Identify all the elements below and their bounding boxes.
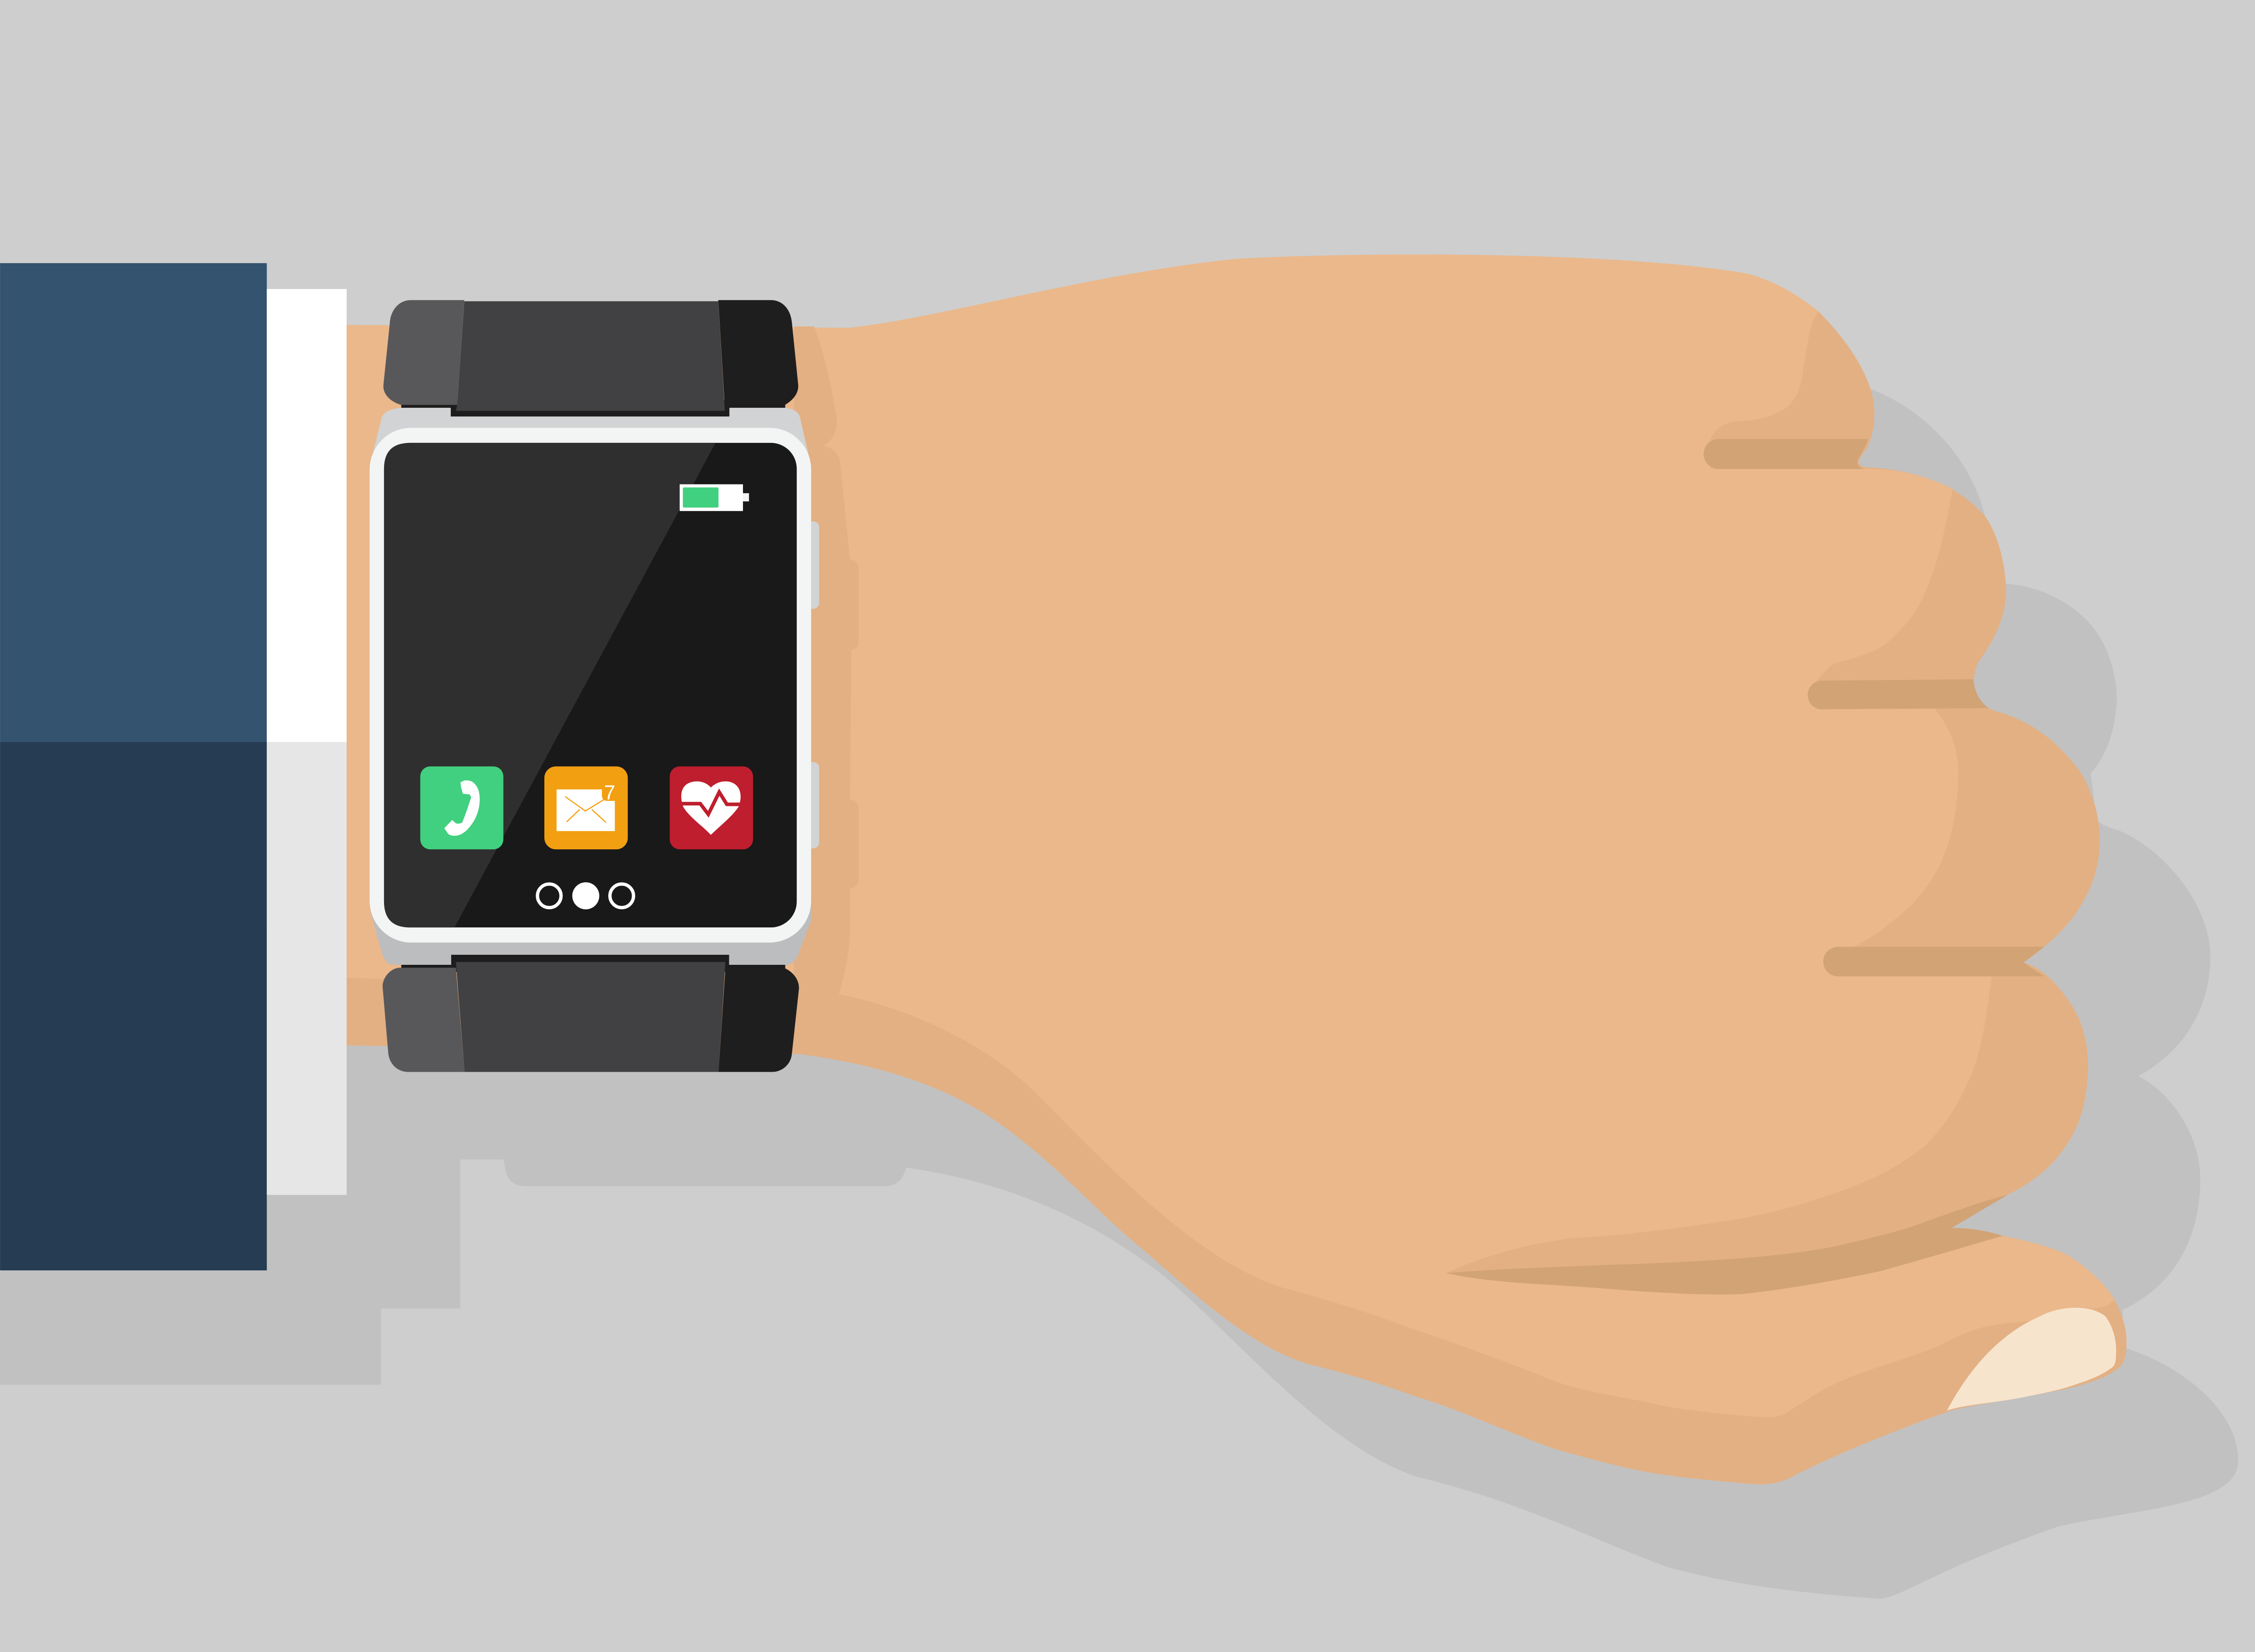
- screen glare: [384, 443, 716, 927]
- cast shadow of arm and hand: [0, 389, 2238, 1599]
- hand base with shaded tone: [347, 254, 2127, 1484]
- icon: mail app: [544, 766, 628, 849]
- knuckle crease 3: [1823, 947, 2044, 976]
- icon: phone app: [420, 766, 503, 849]
- icon: health app: [670, 766, 753, 849]
- side button bottom: [806, 762, 819, 848]
- wrist shading beside the watch: [794, 326, 859, 995]
- page indicator dots: [537, 882, 633, 909]
- hand light tone: [347, 254, 2115, 1417]
- icon: battery: [680, 484, 749, 511]
- thumb crease: [1446, 1195, 2007, 1294]
- case edge top: [369, 408, 811, 489]
- screen: [384, 443, 797, 927]
- thumbnail: [1947, 1308, 2116, 1410]
- smartwatch: [369, 300, 819, 1072]
- bezel: [369, 428, 811, 942]
- knuckle crease 1: [1704, 439, 1868, 469]
- bottom strap: [383, 955, 799, 1072]
- sleeve and cuff: [0, 263, 347, 1270]
- shirt cuff lower: [267, 742, 347, 1195]
- jacket sleeve upper: [0, 263, 267, 742]
- top strap: [383, 300, 798, 416]
- shirt cuff upper: [267, 289, 347, 742]
- knuckle crease 2: [1808, 679, 1989, 709]
- side button top: [806, 521, 819, 609]
- jacket sleeve lower: [0, 742, 267, 1270]
- unread count: 7: [604, 782, 615, 804]
- hand and forearm: [347, 254, 2127, 1484]
- case edge bottom: [369, 899, 811, 965]
